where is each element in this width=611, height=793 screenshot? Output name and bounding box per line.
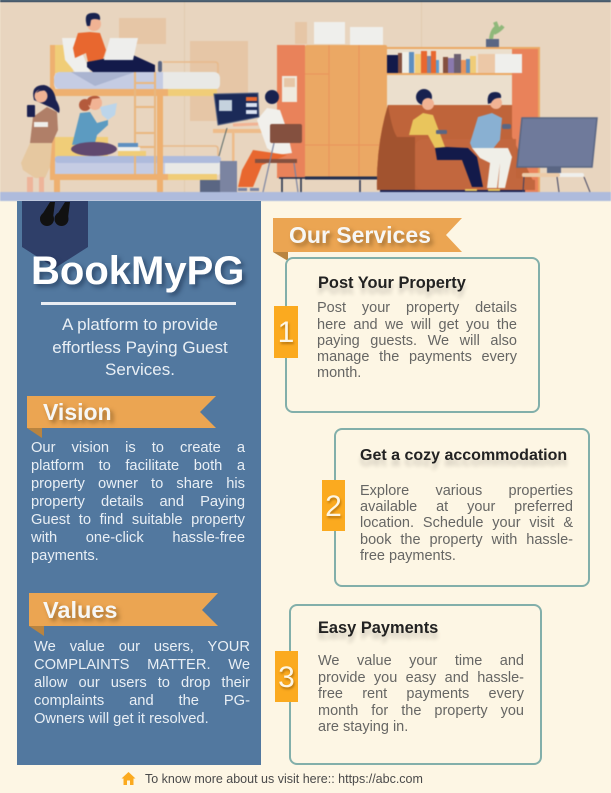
card text: paying guests. We will also bbox=[317, 332, 517, 348]
desk with monitor and person on chair bbox=[200, 45, 305, 192]
text: vision description: Guest to find suitable property bbox=[31, 512, 245, 528]
illustration: shared room header bbox=[0, 0, 611, 202]
card text: provide you easy and hassle- bbox=[318, 670, 524, 686]
text: vision description bbox=[31, 440, 246, 564]
heading: Our Services ribbon: Our Services bbox=[289, 222, 431, 248]
panel: service 1 bbox=[274, 257, 540, 413]
card title: Easy Payments bbox=[318, 619, 438, 637]
text: vision description: payments. bbox=[31, 548, 99, 564]
card frame bbox=[285, 257, 540, 413]
number badge 3 bbox=[275, 651, 298, 702]
title underline bbox=[41, 302, 236, 305]
card text: free payments. bbox=[360, 548, 456, 564]
text: values description: COMPLAINTS MATTER. We bbox=[34, 657, 250, 673]
text: vision description: with one-click hassle-free bbox=[31, 530, 245, 546]
card text bbox=[360, 483, 573, 564]
card frame bbox=[334, 428, 590, 587]
television on stand bbox=[517, 118, 597, 192]
card text: month. bbox=[317, 365, 361, 381]
number badge 2: 2 bbox=[325, 490, 342, 523]
card frame bbox=[289, 604, 542, 765]
heading: Vision ribbon bbox=[27, 396, 216, 438]
card text: month for the property you bbox=[318, 702, 524, 718]
footer bbox=[122, 772, 423, 786]
text: vision description: property owner to share his bbox=[31, 476, 245, 492]
number badge 1: 1 bbox=[278, 316, 294, 349]
text: values description: Owners will get it resolved. bbox=[34, 711, 209, 727]
card title: Post Your Property bbox=[318, 274, 466, 292]
card text: available at your preferred bbox=[360, 499, 573, 515]
text: values description: complaints and the PG- bbox=[34, 693, 250, 709]
number badge 2 bbox=[322, 480, 345, 531]
tagline bbox=[52, 315, 228, 379]
icon: home bbox=[122, 772, 136, 785]
heading: Vision ribbon: Vision bbox=[43, 399, 112, 425]
card text: here and we will get you the bbox=[317, 316, 517, 332]
woman reading on lower bunk bbox=[71, 96, 146, 156]
card text bbox=[318, 653, 524, 735]
number badge 3: 3 bbox=[278, 661, 295, 694]
sofa with two people bbox=[377, 89, 535, 191]
card text: Post your property details bbox=[317, 300, 517, 316]
panel: service 2 bbox=[322, 428, 590, 587]
tagline: A platform to provide bbox=[62, 315, 218, 334]
wardrobe bbox=[295, 22, 387, 192]
panel: service 3 bbox=[275, 604, 542, 765]
title: BookMyPG bbox=[31, 249, 244, 293]
heading: Values ribbon bbox=[29, 593, 218, 636]
card text: location. Schedule your visit & bbox=[360, 515, 573, 531]
heading: Our Services ribbon bbox=[273, 218, 462, 260]
card text bbox=[317, 300, 517, 381]
card text: manage the payments every bbox=[317, 348, 517, 364]
text: vision description: Our vision is to create a bbox=[31, 440, 245, 456]
card text: are staying in. bbox=[318, 719, 408, 735]
text: vision description: platform to facilitate both a bbox=[31, 458, 245, 474]
footer text: To know more about us visit here:: https://abc.com bbox=[145, 772, 423, 786]
bookmark ribbon with quote mark bbox=[22, 201, 88, 268]
tagline: Services. bbox=[105, 360, 175, 379]
tagline: effortless Paying Guest bbox=[52, 338, 228, 356]
number badge 1 bbox=[274, 306, 298, 358]
card text: free rent payments every bbox=[318, 686, 524, 702]
card text: We value your time and bbox=[318, 653, 524, 669]
woman standing with phone bbox=[21, 85, 60, 200]
panel: about BookMyPG bbox=[17, 201, 261, 765]
person on top bunk with laptop bbox=[73, 13, 162, 72]
heading: Values ribbon: Values bbox=[43, 597, 117, 623]
text: values description bbox=[34, 639, 250, 727]
bookshelf with books and plant bbox=[387, 22, 540, 192]
text: vision description: property details and Paying bbox=[31, 494, 245, 510]
bunk bed bbox=[50, 38, 221, 192]
text: values description: allow our users to drop their bbox=[34, 675, 250, 691]
card title: Get a cozy accommodation bbox=[360, 447, 567, 464]
card text: book the property with hassle- bbox=[360, 532, 573, 548]
text: values description: We value our users, YOUR bbox=[34, 639, 250, 655]
card text: Explore various properties bbox=[360, 483, 573, 499]
